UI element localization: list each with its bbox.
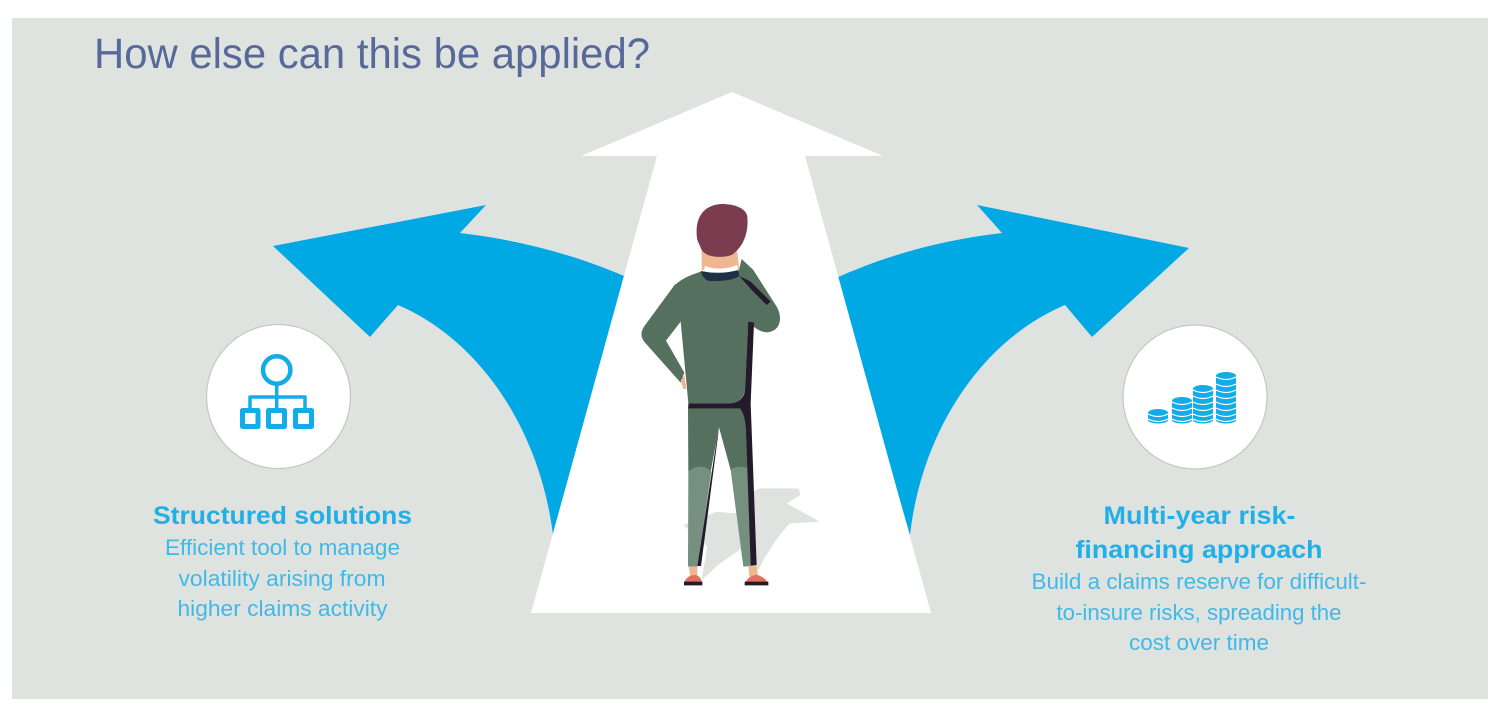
text: multi-year risk-financing approach: financing approach [1076,536,1322,564]
shadow [683,488,820,580]
upper legs [688,407,748,472]
text: multi-year risk-financing approach: cost over time [1129,630,1269,655]
text: multi-year risk-financing approach: Multi-year risk- [1104,502,1296,530]
left circle with hierarchy icon [206,324,350,468]
text: structured solutions: Efficient tool to manage [165,535,400,560]
dark arm shading [739,276,771,305]
collar [703,265,739,273]
lower legs [688,467,711,567]
arrow: right blue [836,205,1189,535]
text: multi-year risk-financing approach: Build a claims reserve for difficult- [1032,569,1366,594]
arrow: central white [531,92,931,613]
torso [675,272,753,403]
text: multi-year risk-financing approach: to-insure risks, spreading the [1056,600,1342,625]
right circle with coins icon [1123,325,1267,469]
text: structured solutions: Structured solutions [153,502,412,530]
person from behind [641,204,820,585]
title: How else can this be applied? [94,30,650,78]
left arm [641,280,687,383]
shoes [684,575,768,585]
text: structured solutions [153,502,412,621]
dark body shading [688,322,757,566]
text: multi-year risk-financing approach [1032,502,1366,655]
icon: hierarchy [242,356,312,426]
ankles [689,565,758,577]
inner leg dark [697,428,719,566]
icon: coin stacks [1148,372,1236,424]
arrow: left blue [273,205,624,535]
text: structured solutions: higher claims activity [178,596,388,621]
hair [697,204,748,257]
neck [702,247,739,270]
collar dark [701,270,739,281]
text: structured solutions: volatility arising from [178,566,386,591]
raised arm sleeve [737,259,780,332]
hand on hip [681,375,686,389]
